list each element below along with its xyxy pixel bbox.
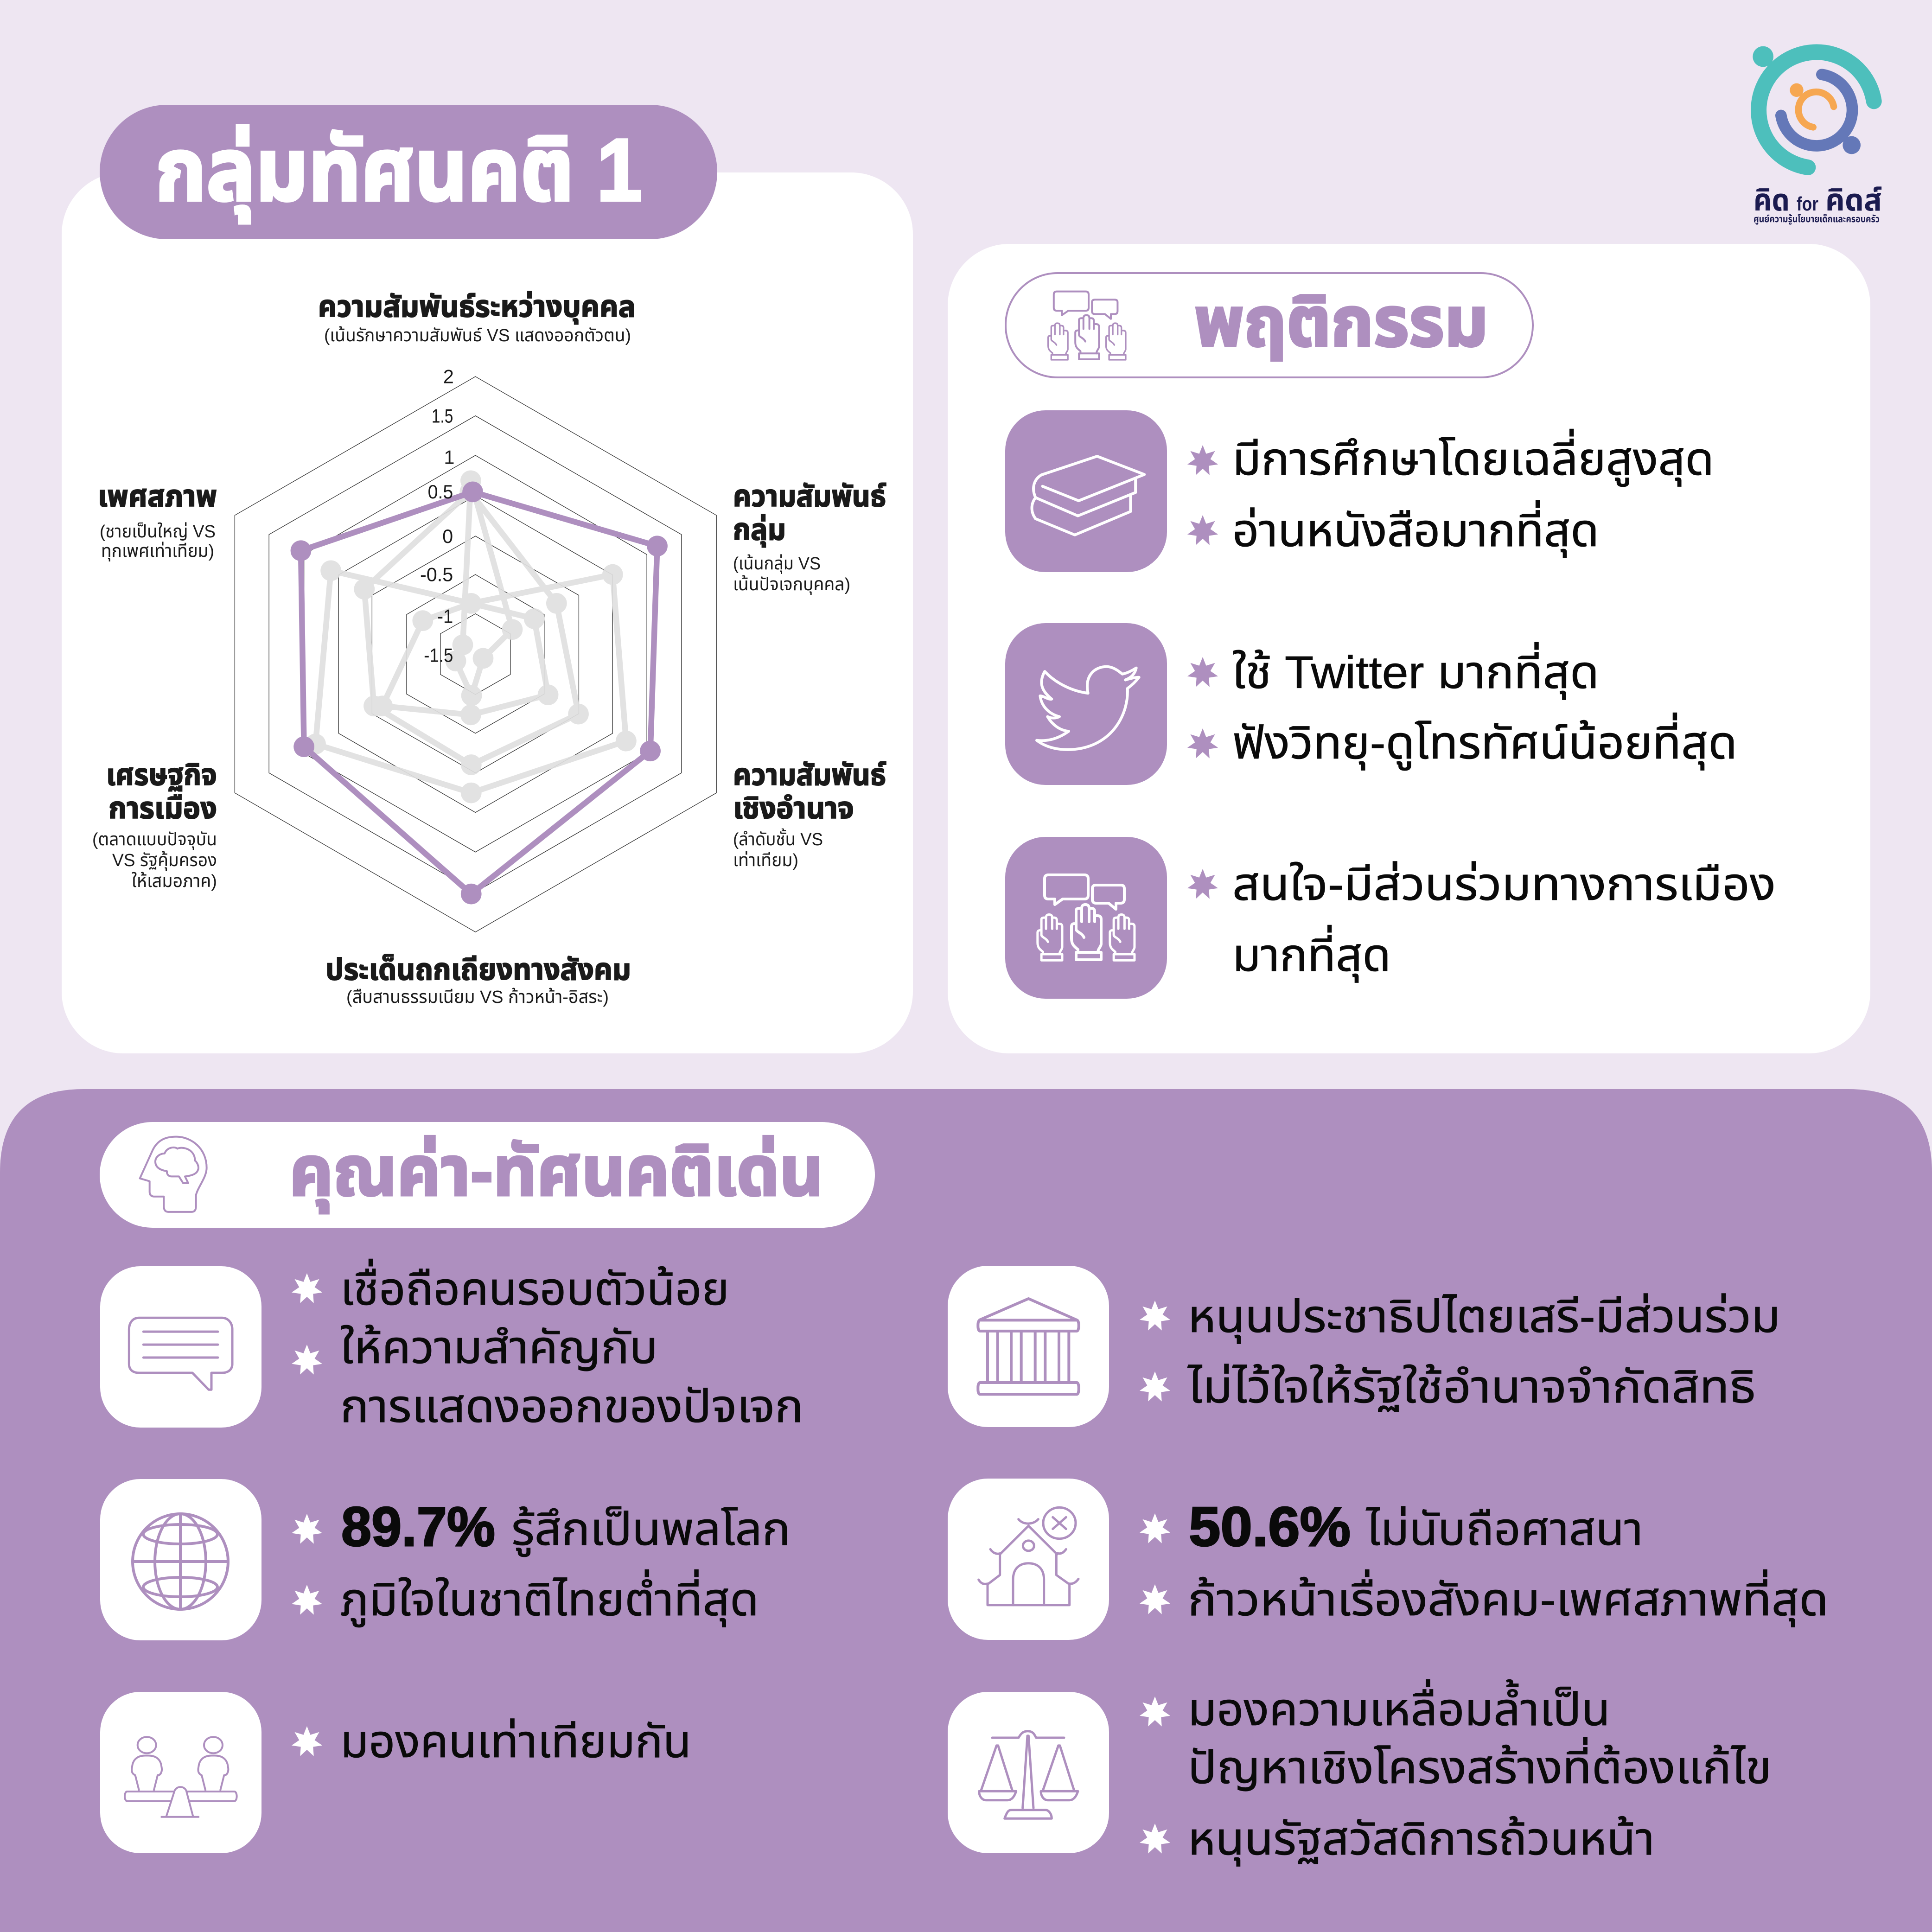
axis tick labels: 0.5	[428, 481, 453, 503]
axis label: upper left: ทุกเพศเท่าเทียม)	[101, 542, 214, 561]
text	[1188, 1496, 1829, 1627]
icon: books	[1032, 456, 1144, 535]
text: มองคนเท่าเทียมกัน	[340, 1716, 691, 1767]
text: เชื่อถือคนรอบตัวน้อย	[340, 1259, 729, 1314]
axis tick labels	[420, 365, 454, 666]
axis tick labels: -1.5	[424, 644, 453, 666]
value row: religion and progressive views	[948, 1479, 1829, 1640]
axis label: upper right: (เน้นกลุ่ม VS	[733, 554, 821, 574]
bullets	[1140, 1301, 1170, 1402]
logo	[1753, 46, 1882, 224]
values heading pill	[100, 1122, 875, 1228]
logo mark	[1753, 46, 1874, 167]
logo wordmark: คิดส์	[1825, 183, 1882, 217]
icon: scales of justice	[979, 1731, 1078, 1818]
title pill	[100, 105, 717, 239]
bullets	[1187, 657, 1218, 759]
panel: radar chart card	[62, 172, 913, 1053]
bullet	[1187, 869, 1218, 899]
bullets	[1140, 1696, 1170, 1854]
axis label: lower right	[733, 758, 886, 870]
text	[1232, 859, 1776, 983]
text: 50.6%	[1189, 1496, 1351, 1558]
icon: people on a balance	[125, 1737, 237, 1817]
axis label: upper right: เน้นปัจเจกบุคคล)	[733, 575, 850, 595]
axis label: lower left: เศรษฐกิจ	[106, 758, 217, 791]
axis tick labels: 0	[442, 525, 453, 547]
value row: equality	[100, 1692, 691, 1853]
text: รู้สึกเป็นพลโลก	[511, 1504, 791, 1557]
text: ใช้ Twitter มากที่สุด	[1232, 642, 1599, 700]
icon: raised hands	[1038, 875, 1135, 960]
text: หนุนประชาธิปไตยเสรี-มีส่วนร่วม	[1188, 1291, 1780, 1344]
bullets	[1140, 1513, 1170, 1614]
radar chart	[235, 365, 716, 932]
axis tick labels: 1.5	[432, 405, 453, 427]
logo wordmark	[1753, 183, 1882, 224]
axis label: bottom: (สืบสานธรรมเนียม VS ก้าวหน้า-อิสระ)	[346, 988, 609, 1007]
series: comparison groups in grey	[305, 470, 637, 803]
logo wordmark: ศูนย์ความรู้นโยบายเด็กและครอบครัว	[1753, 214, 1880, 224]
axis tick labels: 1	[444, 446, 454, 468]
text: หนุนรัฐสวัสดิการถ้วนหน้า	[1188, 1813, 1655, 1867]
text: สนใจ-มีส่วนร่วมทางการเมือง	[1232, 859, 1776, 910]
behaviour row: politics	[1005, 837, 1776, 999]
bullets	[292, 1514, 322, 1615]
icon: twitter bird	[1037, 667, 1139, 750]
axis label: top: (เน้นรักษาความสัมพันธ์ VS แสดงออกตัวตน)	[324, 326, 631, 345]
icon: globe	[133, 1514, 228, 1609]
text: ไม่ไว้ใจให้รัฐใช้อำนาจจำกัดสิทธิ	[1187, 1361, 1756, 1412]
text	[1232, 642, 1737, 771]
text: ฟังวิทยุ-ดูโทรทัศน์น้อยที่สุด	[1232, 713, 1737, 771]
icon: raised hands with speech bubbles	[1048, 292, 1126, 360]
text	[1232, 429, 1714, 558]
axis label: lower left	[92, 758, 217, 891]
axis label: lower left: ให้เสมอภาค)	[132, 872, 217, 891]
panel: behaviour card	[948, 244, 1870, 1053]
behaviour row: media use	[1005, 623, 1737, 785]
icon: government building	[978, 1299, 1079, 1394]
axis label: upper left	[98, 479, 217, 561]
axis label: lower right: ความสัมพันธ์	[733, 758, 886, 791]
text: ก้าวหน้าเรื่องสังคม-เพศสภาพที่สุด	[1188, 1569, 1829, 1627]
text: มากที่สุด	[1232, 925, 1391, 983]
text: อ่านหนังสือมากที่สุด	[1232, 500, 1599, 558]
axis label: lower right: เท่าเทียม)	[733, 851, 798, 870]
text	[340, 1259, 803, 1432]
text: ภูมิใจในชาติไทยต่ำที่สุด	[340, 1569, 759, 1627]
axis label: upper right	[733, 479, 886, 595]
panel: values section	[0, 1089, 1932, 1932]
bullets	[292, 1273, 322, 1375]
text: มีการศึกษาโดยเฉลี่ยสูงสุด	[1232, 429, 1714, 487]
axis tick labels: -1	[437, 606, 453, 627]
value row: inequality and welfare	[948, 1679, 1772, 1867]
icon: temple with cross mark	[979, 1507, 1078, 1605]
axis label: top: ความสัมพันธ์ระหว่างบุคคล	[318, 290, 636, 325]
axis label: lower left: VS รัฐคุ้มครอง	[112, 851, 217, 871]
bullets	[1187, 445, 1218, 545]
axis label: upper left: (ชายเป็นใหญ่ VS	[100, 522, 216, 542]
bullet	[292, 1726, 322, 1756]
heading: behaviour: พฤติกรรม	[1194, 283, 1488, 361]
axis label: lower right: (ลำดับชั้น VS	[733, 828, 823, 849]
logo wordmark: คิด	[1753, 183, 1790, 217]
axis label: bottom: ประเด็นถกเถียงทางสังคม	[325, 953, 631, 986]
text: ให้ความสำคัญกับ	[340, 1322, 658, 1373]
series: group 1 in purple	[291, 482, 668, 905]
axis label: top	[318, 290, 636, 345]
text	[1188, 1679, 1772, 1867]
axis tick labels: -0.5	[420, 563, 453, 585]
behaviour row: education and reading	[1005, 410, 1714, 572]
value row: democracy	[948, 1266, 1780, 1427]
axis label: lower right: เชิงอำนาจ	[733, 791, 854, 825]
behaviour heading pill	[1006, 273, 1533, 377]
text: ไม่นับถือศาสนา	[1365, 1504, 1643, 1555]
text: มองความเหลื่อมล้ำเป็น	[1188, 1679, 1610, 1735]
axis label: lower left: การเมือง	[108, 791, 217, 825]
icon: speech bubble	[129, 1318, 232, 1390]
axis label: lower left: (ตลาดแบบปัจจุบัน	[92, 830, 217, 850]
axis label: bottom	[325, 953, 631, 1007]
text	[340, 1496, 791, 1627]
axis label: upper right: กลุ่ม	[733, 513, 786, 548]
text	[1187, 1291, 1780, 1412]
icon: head with brain	[140, 1137, 207, 1212]
logo wordmark: for	[1797, 193, 1818, 215]
title pill: กลุ่มทัศนคติ 1	[155, 121, 642, 223]
heading: values: คุณค่า-ทัศนคติเด่น	[289, 1132, 823, 1213]
value row: global citizen	[100, 1479, 791, 1640]
axis label: upper right: ความสัมพันธ์	[733, 479, 886, 513]
text: ปัญหาเชิงโครงสร้างที่ต้องแก้ไข	[1188, 1737, 1772, 1793]
text: 89.7%	[341, 1496, 495, 1558]
value row: individual expression	[100, 1259, 803, 1432]
axis tick labels: 2	[443, 365, 454, 387]
text: การแสดงออกของปัจเจก	[340, 1381, 803, 1432]
axis label: upper left: เพศสภาพ	[98, 479, 217, 513]
